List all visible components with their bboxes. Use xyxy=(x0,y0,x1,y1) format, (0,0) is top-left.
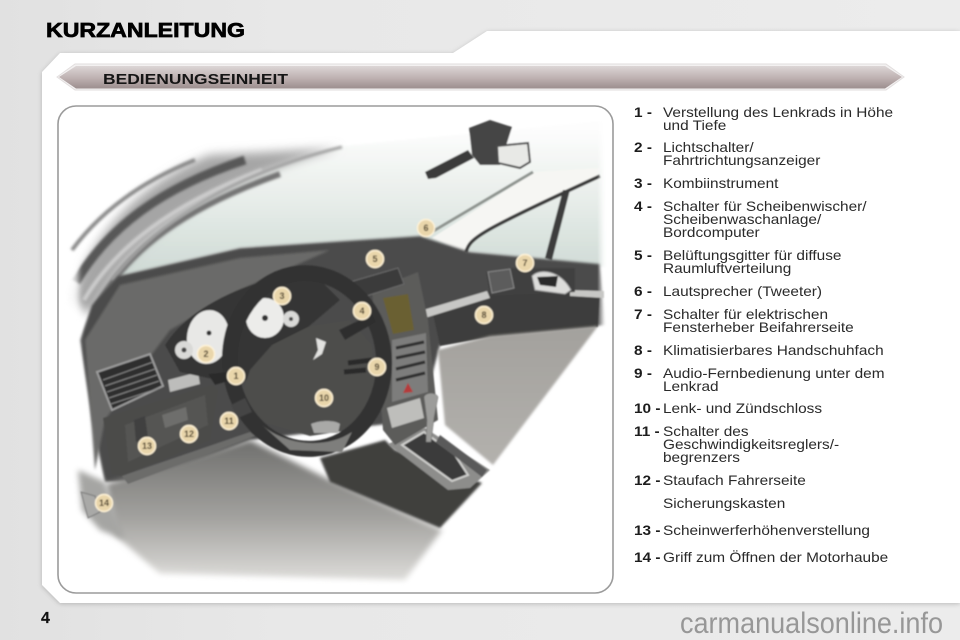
steering wheel xyxy=(208,267,391,455)
callout 8 xyxy=(476,306,492,324)
callout numbers xyxy=(96,220,534,512)
item 2 xyxy=(634,141,820,169)
callout 11: 11 xyxy=(224,416,234,426)
gauges xyxy=(175,298,299,367)
item 13: Scheinwerferhöhenverstellung xyxy=(663,524,870,539)
callout 3 xyxy=(274,288,290,304)
item 10: Lenk- und Zündschloss xyxy=(663,402,822,417)
left switch panel xyxy=(103,396,255,484)
item 11 xyxy=(634,425,839,466)
item 4 xyxy=(634,200,867,241)
callout 5: 5 xyxy=(372,254,378,264)
A-pillar left xyxy=(72,147,342,315)
chrome trim left xyxy=(168,372,200,392)
callout 9 xyxy=(368,358,386,376)
item 2: Lichtschalter/ xyxy=(663,141,755,156)
illustration frame xyxy=(58,106,613,593)
page number: 4 xyxy=(41,610,50,627)
callout 3: 3 xyxy=(279,291,285,301)
fade on dashboard right end xyxy=(598,150,612,328)
callout 5 xyxy=(366,250,384,268)
item 8: Klimatisierbares Handschuhfach xyxy=(663,344,884,359)
item 1: und Tiefe xyxy=(663,119,726,134)
callout 6: 6 xyxy=(423,223,429,233)
callout 10 xyxy=(316,390,332,406)
item 13: 13 - xyxy=(634,524,661,539)
windscreen strut and quarter pillar xyxy=(425,168,600,260)
chrome trim xyxy=(423,290,604,318)
rear-view mirror xyxy=(425,120,530,179)
callout 8: 8 xyxy=(481,310,487,320)
item 9: Lenkrad xyxy=(663,380,719,395)
glove box xyxy=(432,292,600,346)
left sill xyxy=(78,470,125,540)
left carpet xyxy=(106,440,442,580)
callout 10: 10 xyxy=(319,393,329,403)
callout 14: 14 xyxy=(99,498,109,508)
item 6: 6 - xyxy=(634,285,652,300)
item 11: Schalter des xyxy=(663,425,749,440)
item 9: Audio-Fernbedienung unter dem xyxy=(663,367,885,382)
item 12: Staufach Fahrerseite xyxy=(663,474,806,489)
gear selector surround xyxy=(388,428,490,490)
item 5: 5 - xyxy=(634,249,652,264)
item 1: Verstellung des Lenkrads in Höhe xyxy=(663,106,893,121)
callout 13: 13 xyxy=(142,441,152,451)
item 7: Fensterheber Beifahrerseite xyxy=(663,321,854,336)
item 14: Griff zum Öffnen der Motorhaube xyxy=(663,549,888,566)
item 1 xyxy=(634,106,893,134)
gear lever xyxy=(424,393,438,442)
callout 4: 4 xyxy=(359,306,365,316)
callout 14 xyxy=(96,494,112,512)
callout 2: 2 xyxy=(203,349,209,359)
callout 1: 1 xyxy=(233,371,239,381)
item 11: Geschwindigkeitsreglers/- xyxy=(663,438,839,453)
item 7: 7 - xyxy=(634,308,652,323)
instrument cluster hood xyxy=(165,280,340,380)
item 9: 9 - xyxy=(634,367,652,382)
item 14: 14 - xyxy=(634,551,661,566)
callout 12 xyxy=(180,426,198,442)
item 9 xyxy=(634,367,885,395)
dashboard top xyxy=(80,236,606,482)
banner heading: BEDIENUNGSEINHEIT xyxy=(103,71,288,88)
item 7: Schalter für elektrischen xyxy=(663,308,828,323)
item 5: Belüftungsgitter für diffuse xyxy=(663,249,841,264)
callout 13 xyxy=(138,438,156,454)
item 4: Scheibenwaschanlage/ xyxy=(663,213,822,228)
item 8: 8 - xyxy=(634,344,652,359)
centre stack xyxy=(350,268,438,445)
fade on dashboard left end xyxy=(68,266,84,358)
legend list xyxy=(634,106,893,566)
item 11: begrenzers xyxy=(663,451,740,466)
item 4: Schalter für Scheibenwischer/ xyxy=(663,200,867,215)
callout 2 xyxy=(198,346,214,362)
callout 7: 7 xyxy=(522,258,528,268)
right door handle xyxy=(486,268,575,296)
left air vent xyxy=(97,354,163,410)
right carpet xyxy=(438,326,598,465)
callout 7 xyxy=(516,254,534,272)
item 1: 1 - xyxy=(634,106,652,121)
windscreen xyxy=(122,128,604,275)
callout 1 xyxy=(228,368,244,384)
item 6: Lautsprecher (Tweeter) xyxy=(663,285,822,300)
callout 12: 12 xyxy=(184,429,194,439)
bottom-left hood handle xyxy=(81,492,100,518)
callout 11 xyxy=(220,412,238,430)
item 3: 3 - xyxy=(634,177,652,192)
panel: dashboard illustration xyxy=(58,100,631,600)
item 5: Raumluftverteilung xyxy=(663,262,791,277)
item 11: 11 - xyxy=(634,425,660,440)
item 7 xyxy=(634,308,854,336)
item 12 xyxy=(634,474,806,512)
item 2: 2 - xyxy=(634,141,652,156)
item 4: Bordcomputer xyxy=(663,226,760,241)
callout 4 xyxy=(354,302,370,320)
item 10: 10 - xyxy=(634,402,661,417)
item 4: 4 - xyxy=(634,200,652,215)
title: KURZANLEITUNG xyxy=(46,20,245,42)
item 3: Kombiinstrument xyxy=(663,177,778,192)
callout 9: 9 xyxy=(374,362,380,372)
centre console base xyxy=(320,440,482,528)
item 12: Sicherungskasten xyxy=(663,497,785,512)
section banner xyxy=(57,64,904,90)
item 5 xyxy=(634,249,841,277)
item 2: Fahrtrichtungsanzeiger xyxy=(663,154,820,169)
item 12: 12 - xyxy=(634,474,661,489)
callout 6 xyxy=(418,220,434,236)
